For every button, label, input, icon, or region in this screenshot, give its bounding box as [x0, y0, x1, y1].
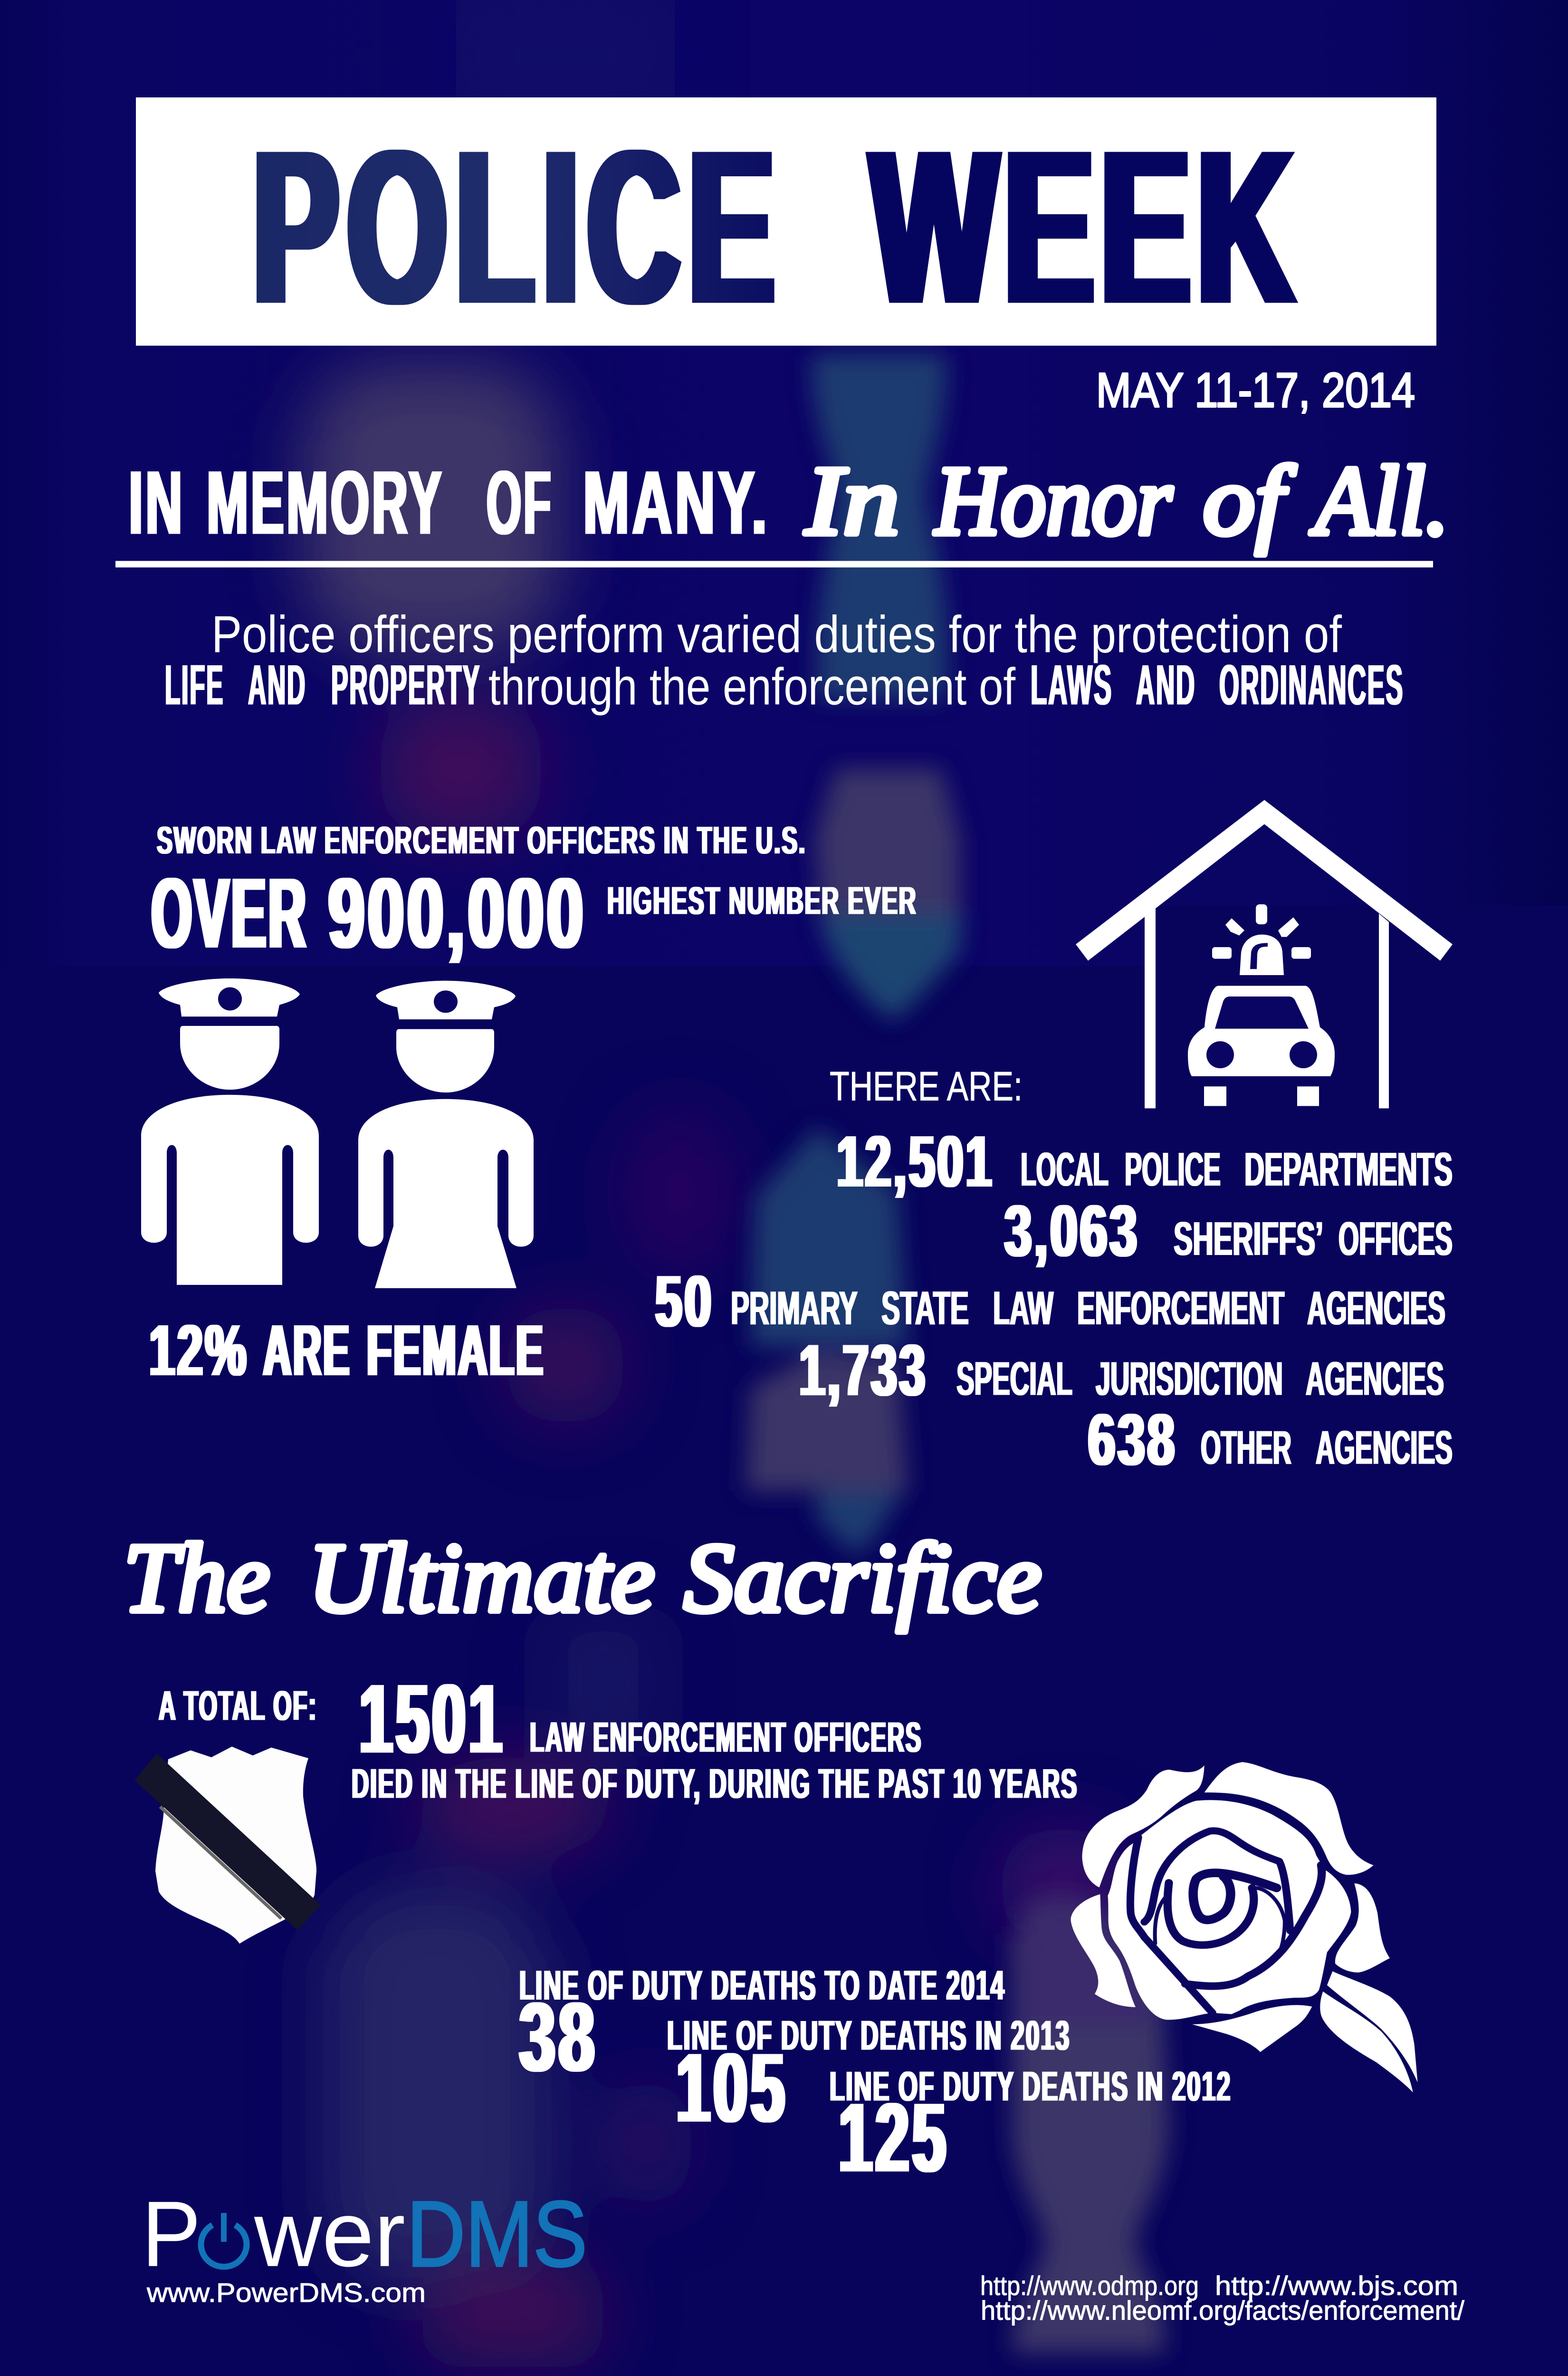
title banner [136, 97, 1436, 349]
icon: rose [1071, 1762, 1417, 2092]
line of duty deaths 2014 [519, 1962, 1005, 2092]
source links: http://www.odmp.org [980, 2271, 1199, 2301]
tagline: All. [1310, 446, 1449, 556]
intro paragraph: LAWS [1031, 653, 1113, 717]
icon: power symbol [201, 2213, 247, 2267]
agency stat: state agencies [655, 1260, 1445, 1342]
agency stat: state agencies: ENFORCEMENT [1077, 1282, 1284, 1335]
agency stat: other agencies: AGENCIES [1316, 1421, 1453, 1474]
agency stat: special jurisdiction: JURISDICTION [1096, 1352, 1283, 1405]
line of duty deaths 2012 [830, 2062, 1232, 2193]
intro paragraph: AND [1136, 653, 1196, 717]
icon: police car in garage [1076, 800, 1453, 1108]
agency stat: sheriffs offices: 3,063 [1004, 1190, 1139, 1272]
title text: POLICE [253, 104, 783, 349]
law enforcement officers label: LAW ENFORCEMENT OFFICERS [530, 1714, 922, 1761]
source links: http://www.nleomf.org/facts/enforcement/ [981, 2296, 1464, 2326]
agency stat: sheriffs offices: SHERIFFS’ [1174, 1213, 1323, 1265]
over 900,000 figure: 900,000 [328, 857, 586, 969]
website: www.PowerDMS.com [146, 2278, 426, 2308]
agency stat: local police departments: POLICE [1125, 1143, 1221, 1196]
intro paragraph [165, 605, 1404, 717]
1501 figure: 1501 [359, 1664, 505, 1774]
agency stat: local police departments [837, 1120, 1453, 1202]
sworn officers heading: SWORN LAW ENFORCEMENT OFFICERS IN THE U.S. [157, 819, 806, 862]
agency stat: state agencies: PRIMARY [731, 1282, 858, 1335]
PowerDMS logo: wer [254, 2182, 405, 2286]
agency stat: special jurisdiction [799, 1329, 1444, 1411]
agency stat: local police departments: LOCAL [1021, 1143, 1109, 1196]
tagline: MEMORY [207, 451, 444, 553]
icon: siren [1212, 904, 1311, 975]
intro paragraph: AND [248, 653, 306, 717]
line of duty deaths 2013 [667, 2012, 1071, 2143]
female share figure: 12% [149, 1310, 249, 1391]
agency stat: sheriffs offices [1004, 1190, 1453, 1272]
tagline: OF [487, 451, 553, 553]
agency stat: state agencies: AGENCIES [1307, 1282, 1445, 1335]
agency stat: special jurisdiction: 1,733 [799, 1329, 927, 1411]
ultimate sacrifice heading [124, 1523, 1042, 1633]
a total of label: A TOTAL OF: [159, 1682, 317, 1729]
tagline: of [1203, 446, 1296, 556]
agency stat: other agencies [1088, 1399, 1453, 1480]
source links: http://www.bjs.com [1215, 2271, 1458, 2301]
icon: female officer [358, 981, 534, 1288]
line of duty deaths 2012: LINE OF DUTY DEATHS IN 2012 [830, 2062, 1232, 2109]
tagline: MANY. [583, 451, 770, 553]
source links [980, 2271, 1464, 2326]
line of duty deaths 2013: 105 [676, 2033, 788, 2143]
agency stat: local police departments: 12,501 [837, 1120, 994, 1202]
tagline: IN [129, 451, 185, 553]
agency stat: state agencies: 50 [655, 1260, 714, 1342]
date: MAY 11-17, 2014 [1096, 363, 1415, 417]
there are label: THERE ARE: [830, 1063, 1023, 1109]
agency stat: other agencies: OTHER [1201, 1421, 1291, 1474]
line of duty deaths 2014: 38 [519, 1983, 598, 2092]
intro paragraph: through the enforcement of [488, 657, 1015, 716]
tagline underline [115, 561, 1433, 567]
ultimate sacrifice heading: The [124, 1523, 270, 1633]
line of duty deaths 2014: LINE OF DUTY DEATHS TO DATE 2014 [519, 1962, 1005, 2009]
PowerDMS logo [142, 2182, 587, 2286]
icon: car [1188, 986, 1335, 1106]
PowerDMS logo: P [142, 2182, 201, 2286]
tagline: Honor [934, 446, 1173, 556]
intro paragraph: PROPERTY [331, 653, 481, 717]
female share figure: ARE [263, 1310, 351, 1391]
agency stat: sheriffs offices: OFFICES [1339, 1213, 1453, 1265]
line of duty deaths 2012: 125 [839, 2083, 949, 2193]
highest number note: HIGHEST NUMBER EVER [607, 879, 917, 922]
agency stat: state agencies: STATE [881, 1282, 969, 1335]
tagline: In [805, 446, 899, 556]
tagline [129, 446, 1449, 556]
agency stat: special jurisdiction: AGENCIES [1306, 1352, 1444, 1405]
over 900,000 figure: OVER [152, 857, 308, 969]
PowerDMS logo: DMS [407, 2182, 587, 2286]
agency stat: other agencies: 638 [1088, 1399, 1177, 1480]
agency stat: special jurisdiction: SPECIAL [956, 1352, 1072, 1405]
intro paragraph: Police officers perform varied duties for the protection of [211, 605, 1342, 663]
line of duty deaths 2013: LINE OF DUTY DEATHS IN 2013 [667, 2012, 1071, 2059]
ultimate sacrifice heading: Sacrifice [684, 1523, 1042, 1633]
agency stat: state agencies: LAW [993, 1282, 1053, 1335]
ultimate sacrifice heading: Ultimate [308, 1523, 655, 1633]
icon: shield with mourning band [134, 1746, 321, 1944]
female share figure [149, 1310, 545, 1391]
icon: male officer [141, 978, 319, 1285]
female share figure: FEMALE [367, 1310, 545, 1391]
title text: WEEK [870, 104, 1301, 349]
intro paragraph: LIFE [165, 653, 224, 717]
